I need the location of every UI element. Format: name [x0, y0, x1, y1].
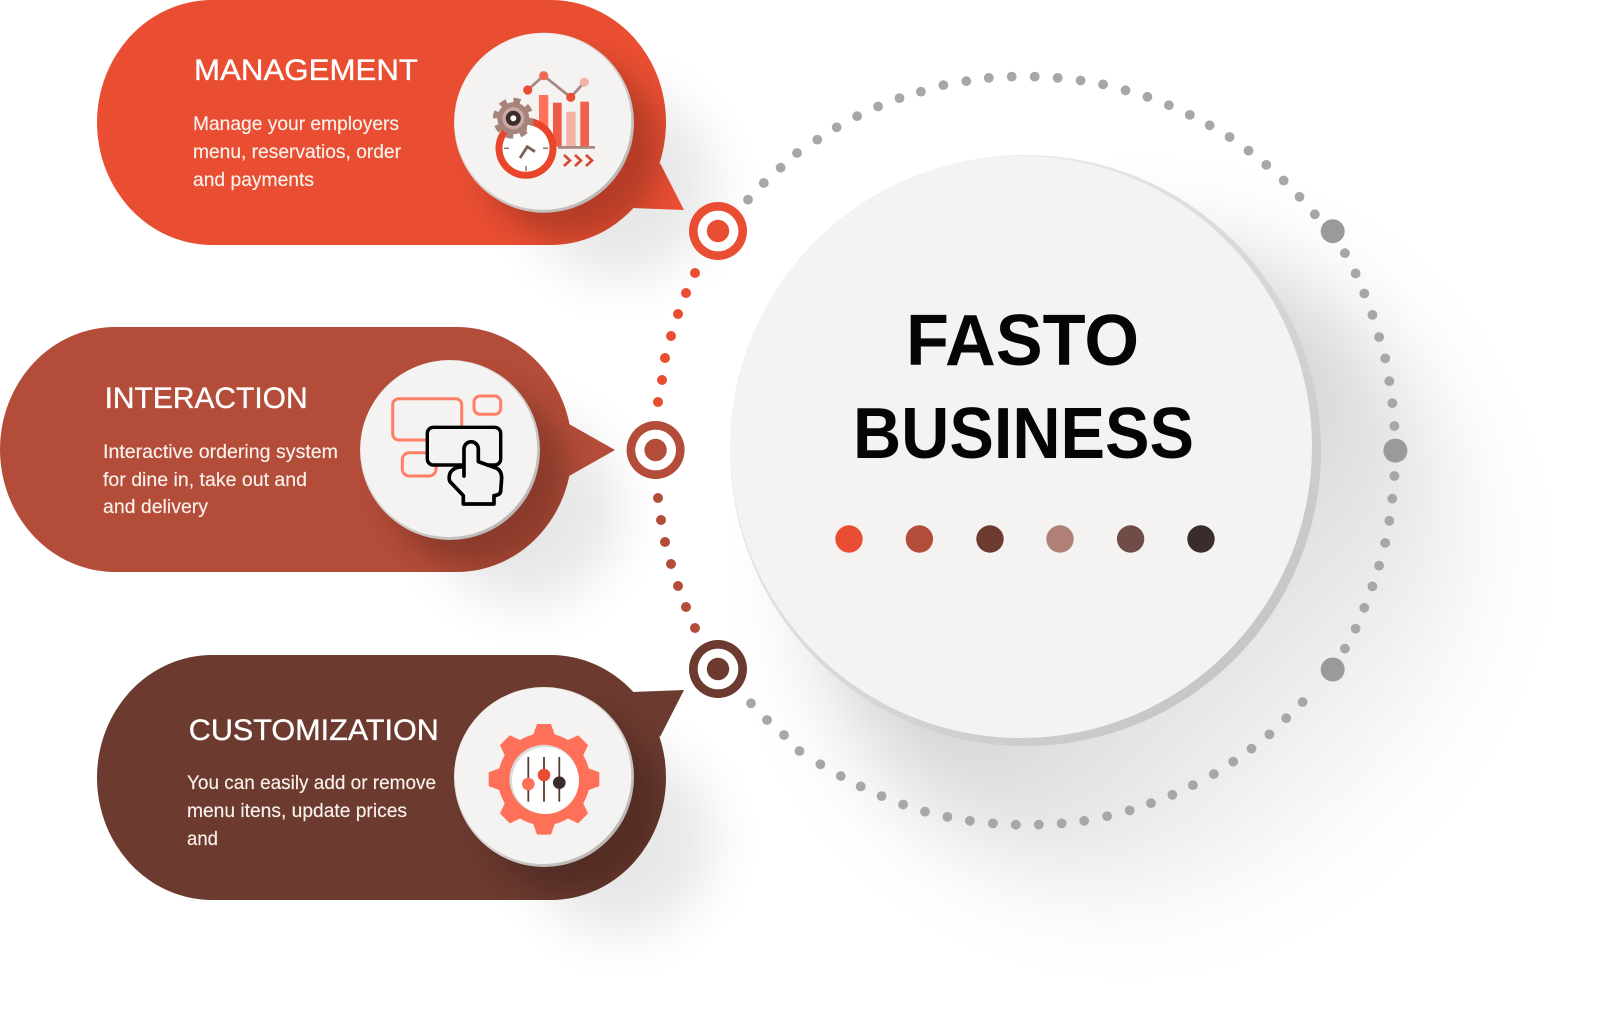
panel: interaction: [0, 327, 615, 572]
bubble shadows: [431, 90, 715, 935]
heading: interaction: INTERACTION: [105, 382, 308, 415]
icon: chart, gear and clock: [496, 71, 595, 179]
icon: settings gear with sliders: [489, 724, 599, 835]
panel: management: [97, 0, 684, 245]
target marker: management: [689, 202, 747, 260]
text: management description: Manage your employers: [193, 113, 399, 135]
text: interaction description: and delivery: [103, 496, 208, 518]
title: [853, 300, 1194, 474]
text: customization description: and: [187, 828, 218, 850]
text: management description: and payments: [193, 169, 314, 191]
text: interaction description: Interactive ordering system: [103, 441, 338, 463]
target marker: customization: [689, 640, 747, 698]
icon disc: interaction: [360, 360, 540, 540]
icon: touch screen: [393, 396, 502, 504]
title: BUSINESS: [853, 393, 1194, 474]
colour dots row: [835, 525, 1215, 553]
text: customization description: menu itens, update prices: [187, 800, 407, 822]
dotted ring: grey: [743, 72, 1407, 830]
target marker: interaction: [627, 421, 685, 479]
central circle: [730, 155, 1321, 746]
dotted arc: lower red-brown: [653, 493, 700, 633]
heading: customization: CUSTOMIZATION: [189, 714, 439, 747]
text: customization description: [187, 772, 436, 850]
text: interaction description: [103, 441, 338, 518]
heading: management: MANAGEMENT: [194, 54, 418, 87]
text: customization description: You can easily add or remove: [187, 772, 436, 794]
text: management description: menu, reservatios, order: [193, 141, 401, 163]
icon disc: management: [454, 33, 634, 213]
panel: customization: [97, 655, 684, 900]
icon disc: customization: [454, 687, 634, 867]
dotted arc: upper red: [653, 268, 700, 407]
central circle shadow: [830, 258, 1470, 898]
text: management description: [193, 113, 401, 191]
text: interaction description: for dine in, take out and: [103, 469, 307, 491]
title: FASTO: [906, 300, 1139, 381]
